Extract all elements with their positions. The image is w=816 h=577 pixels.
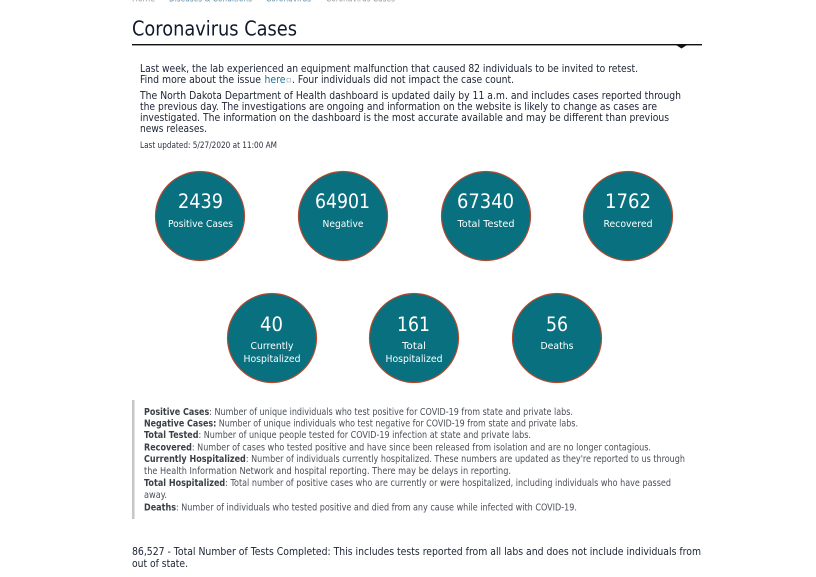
dashboard description paragraph: the previous day. The investigations are ongoing and information on the website is likely to change as cases are xyxy=(140,102,657,113)
breadcrumb xyxy=(132,0,395,4)
title rule with notch xyxy=(132,44,702,48)
definitions block: Total Tested: Number of unique people tested for COVID-19 infection at state and private labs. xyxy=(144,430,531,441)
stat: recovered: Recovered xyxy=(604,219,652,230)
stat: negative xyxy=(298,172,388,260)
definitions block: Deaths: Number of individuals who tested positive and died from any cause while infected with COVID-19. xyxy=(144,502,577,514)
definitions block: Negative Cases: Number of unique individuals who test negative for COVID-19 from state and private labs. xyxy=(144,418,578,430)
definitions block: away. xyxy=(144,490,167,501)
total tests note: out of state. xyxy=(132,559,188,570)
definitions block: Recovered: Number of cases who tested positive and have since been released from isolation and are no longer contagious. xyxy=(144,442,651,454)
dashboard description paragraph: The North Dakota Department of Health dashboard is updated daily by 11 a.m. and includes cases reported through xyxy=(139,91,681,102)
total tests note: 86,527 - Total Number of Tests Completed: This includes tests reported from all labs and does not include individuals from xyxy=(132,547,701,558)
notice paragraph: here xyxy=(264,75,286,86)
stat: deaths xyxy=(512,294,602,382)
definitions block: Currently Hospitalized: Number of individuals currently hospitalized. These numbers are updated as they're reported to us through xyxy=(144,454,685,465)
last updated: Last updated: 5/27/2020 at 11:00 AM xyxy=(140,141,277,151)
dashboard description paragraph: investigated. The information on the dashboard is the most accurate available and may be different than previous xyxy=(140,113,669,124)
stat: total tested xyxy=(442,172,530,260)
notice paragraph xyxy=(140,64,638,86)
stat: negative: Negative xyxy=(322,219,364,230)
stat: recovered xyxy=(584,172,672,260)
stat: currently hospitalized: Hospitalized xyxy=(244,354,300,365)
stat: deaths: Deaths xyxy=(540,341,574,352)
stat: total hospitalized: Total xyxy=(401,341,426,352)
definitions block: Total Hospitalized: Total number of positive cases who are currently or were hospitalized, including individuals who have passed xyxy=(144,478,671,489)
stat: total tested: Total Tested xyxy=(457,219,514,230)
notice paragraph: Find more about the issue xyxy=(140,75,261,86)
stat: negative: 64901 xyxy=(315,190,370,213)
stat: positive cases: 2439 xyxy=(178,190,223,213)
title: Coronavirus Cases xyxy=(132,16,297,40)
dashboard description paragraph xyxy=(139,91,681,135)
definitions block xyxy=(132,400,685,519)
stat: total hospitalized: Hospitalized xyxy=(386,354,442,365)
stat: currently hospitalized xyxy=(228,294,316,382)
notice paragraph: Last week, the lab experienced an equipment malfunction that caused 82 individuals to be invited to retest. xyxy=(140,64,638,75)
stat: currently hospitalized: 40 xyxy=(260,313,283,336)
dashboard description paragraph: news releases. xyxy=(140,124,207,135)
stat: total hospitalized: 161 xyxy=(397,313,430,336)
stat: positive cases: Positive Cases xyxy=(168,219,233,230)
stat: positive cases xyxy=(156,172,244,260)
notice paragraph: . Four individuals did not impact the case count. xyxy=(292,75,514,86)
definitions block: Positive Cases: Number of unique individuals who test positive for COVID-19 from state and private labs. xyxy=(144,407,573,418)
total tests note xyxy=(132,547,701,570)
definitions block: the Health Information Network and hospital reporting. There may be delays in reporting. xyxy=(144,466,511,477)
stat: total hospitalized xyxy=(370,294,458,382)
stat: total tested: 67340 xyxy=(457,190,514,213)
stat: currently hospitalized: Currently xyxy=(250,341,294,352)
stat: recovered: 1762 xyxy=(605,190,651,213)
stat: deaths: 56 xyxy=(546,313,568,336)
